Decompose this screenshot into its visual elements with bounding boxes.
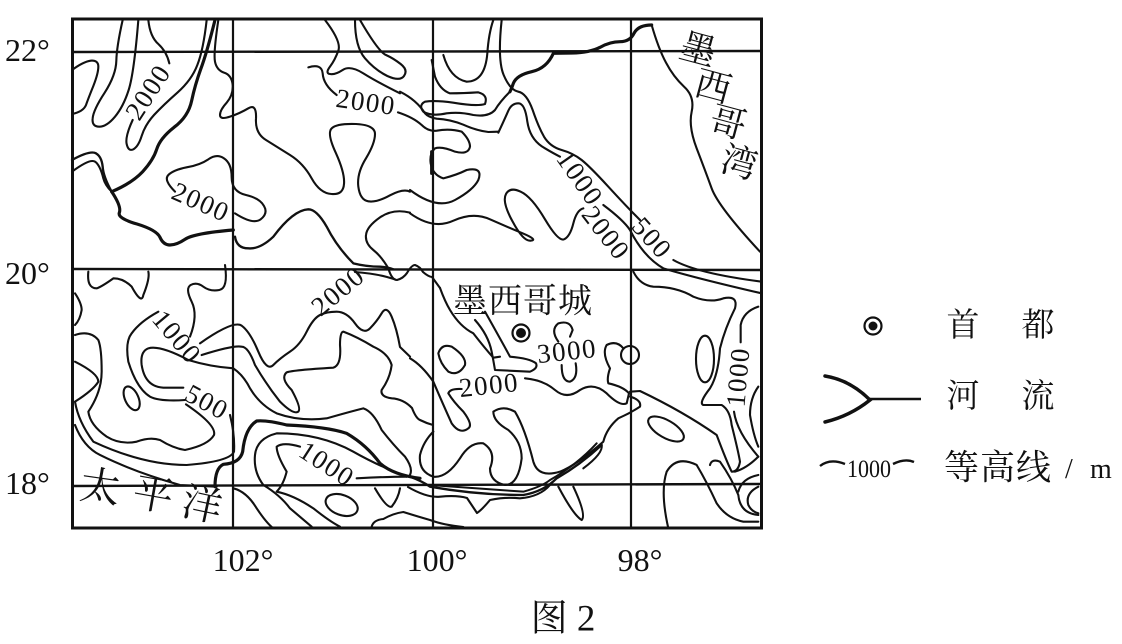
legend: capital (864, 307, 1054, 344)
latitude labels: 18° (5, 465, 50, 501)
legend: river (825, 376, 1054, 422)
contour value labels: 3000 (536, 333, 598, 369)
place name: Pacific Ocean: 平 (129, 469, 177, 521)
place name: Mexico City: 墨西哥城 (453, 282, 593, 320)
legend (820, 307, 1112, 488)
latitude labels: 20° (5, 255, 50, 291)
contour value labels: 1000 (720, 346, 756, 408)
latitude labels: 22° (5, 32, 50, 68)
contour value labels: 2000 (305, 260, 371, 322)
contour value labels: 2000 (167, 176, 235, 228)
contour value labels: 2000 (334, 83, 398, 121)
latitude labels (5, 32, 50, 501)
longitude labels (213, 542, 662, 578)
legend: river: 河 (946, 379, 980, 415)
contours and rivers: northwest (72, 20, 440, 288)
map graticule (72, 19, 762, 528)
figure caption: 图 2 (531, 598, 595, 640)
legend: contour line: / (1065, 454, 1073, 485)
contours and rivers: southwest (75, 265, 463, 528)
legend: contour line (820, 448, 1112, 488)
contour value labels: 2000 (119, 59, 177, 125)
place name: Gulf of Mexico: 西 (690, 63, 736, 111)
contour value labels: 500 (626, 211, 678, 265)
place name: Gulf of Mexico: 墨 (675, 26, 721, 74)
longitude labels: 98° (618, 542, 662, 578)
place name: Gulf of Mexico (675, 26, 762, 187)
place name: Pacific Ocean: 洋 (178, 479, 226, 531)
place name: Pacific Ocean: 太 (77, 462, 123, 512)
place name: Gulf of Mexico: 哥 (705, 99, 751, 147)
legend: contour line: m (1090, 454, 1112, 485)
contours and rivers: northeast (410, 20, 762, 293)
contour value labels: 500 (180, 378, 234, 426)
longitude labels: 102° (213, 542, 273, 578)
contour value labels: 1000 (551, 145, 609, 211)
legend: contour line: 等高线 (944, 448, 1052, 488)
legend: contour line: 1000 (847, 456, 891, 483)
contour value labels: 1000 (294, 435, 360, 493)
legend: capital: 首 (946, 307, 980, 344)
contours and rivers: southeast (408, 272, 758, 528)
legend: capital: 都 (1022, 307, 1054, 344)
contour value labels: 2000 (576, 200, 636, 266)
longitude labels: 100° (407, 542, 467, 578)
place name: Pacific Ocean (77, 462, 226, 531)
contour value labels (119, 59, 756, 493)
contour value labels: 1000 (146, 304, 208, 370)
legend: river: 流 (1022, 378, 1054, 415)
place name: Gulf of Mexico: 湾 (716, 139, 762, 187)
contour value labels: 2000 (458, 367, 520, 403)
icon: capital marker on map (512, 324, 530, 342)
contours and rivers: north centre (398, 60, 510, 203)
